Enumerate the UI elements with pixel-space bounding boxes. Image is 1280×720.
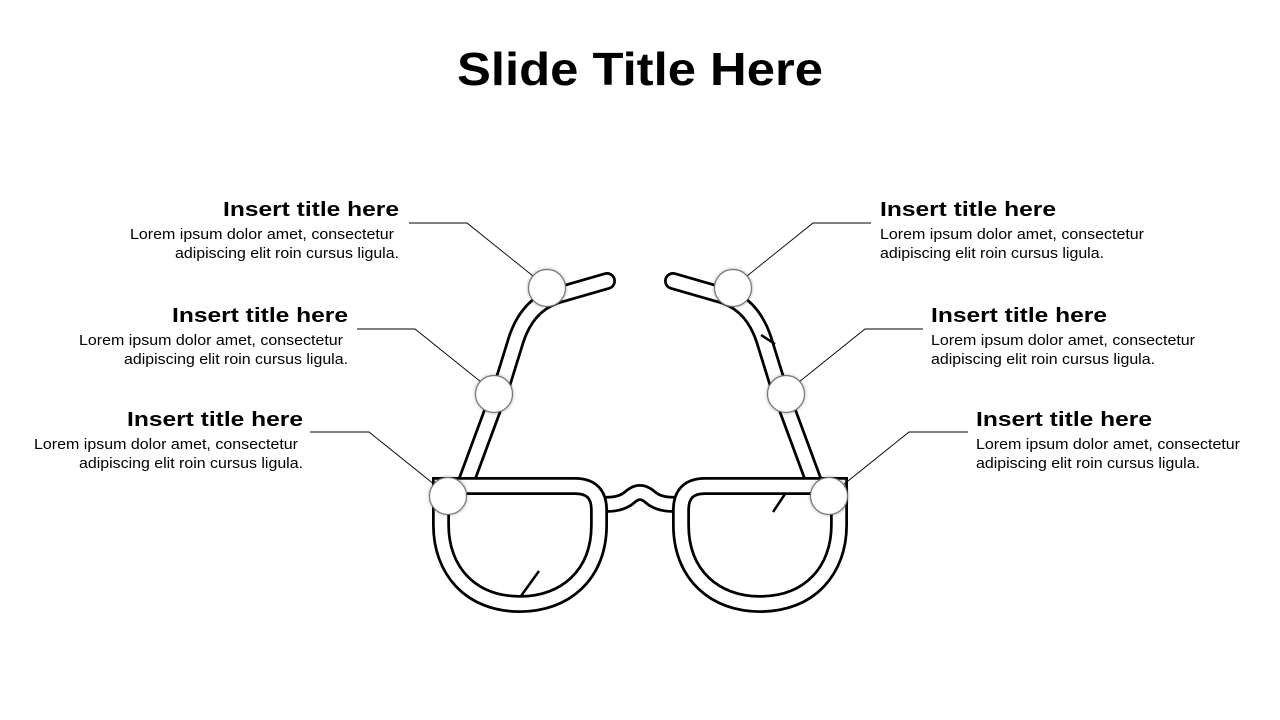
text block: left 3: Lorem ipsum dolor amet, consectetur [34, 437, 298, 453]
text block: right 2: Insert title here [931, 305, 1107, 327]
temple: left [466, 281, 607, 482]
title: Slide Title Here [457, 43, 823, 95]
lens: right [681, 486, 839, 604]
text block: right 1: adipiscing elit roin cursus ligula. [880, 246, 1104, 262]
text block: right 1: Lorem ipsum dolor amet, consectetur [880, 227, 1144, 243]
text block: left 2: adipiscing elit roin cursus ligula. [124, 352, 348, 368]
text block: left 2 [79, 305, 348, 368]
text block: left 1: adipiscing elit roin cursus ligula. [175, 246, 399, 262]
callout circles [430, 270, 848, 514]
text block: left 3 [34, 409, 303, 472]
text block: left 1 [130, 199, 399, 262]
text block: right 2: adipiscing elit roin cursus ligula. [931, 352, 1155, 368]
text block: left 3: Insert title here [127, 409, 303, 431]
text block: right 3: Lorem ipsum dolor amet, consectetur [976, 437, 1240, 453]
text block: right 1: Insert title here [880, 199, 1056, 221]
text block: right 1 [880, 199, 1144, 262]
text block: left 3: adipiscing elit roin cursus ligula. [79, 456, 303, 472]
temple: right [673, 281, 814, 482]
glasses illustration [441, 281, 839, 604]
text block: left 1: Lorem ipsum dolor amet, consectetur [130, 227, 394, 243]
connector lines [310, 223, 968, 485]
lens: left [441, 486, 599, 604]
text block: left 2: Insert title here [172, 305, 348, 327]
text block: left 2: Lorem ipsum dolor amet, consectetur [79, 333, 343, 349]
text block: right 3 [976, 409, 1240, 472]
text block: left 1: Insert title here [223, 199, 399, 221]
text block: right 3: adipiscing elit roin cursus ligula. [976, 456, 1200, 472]
text block: right 2: Lorem ipsum dolor amet, consectetur [931, 333, 1195, 349]
text block: right 2 [931, 305, 1195, 368]
crack marks [521, 335, 785, 596]
bridge [600, 492, 680, 504]
text block: right 3: Insert title here [976, 409, 1152, 431]
